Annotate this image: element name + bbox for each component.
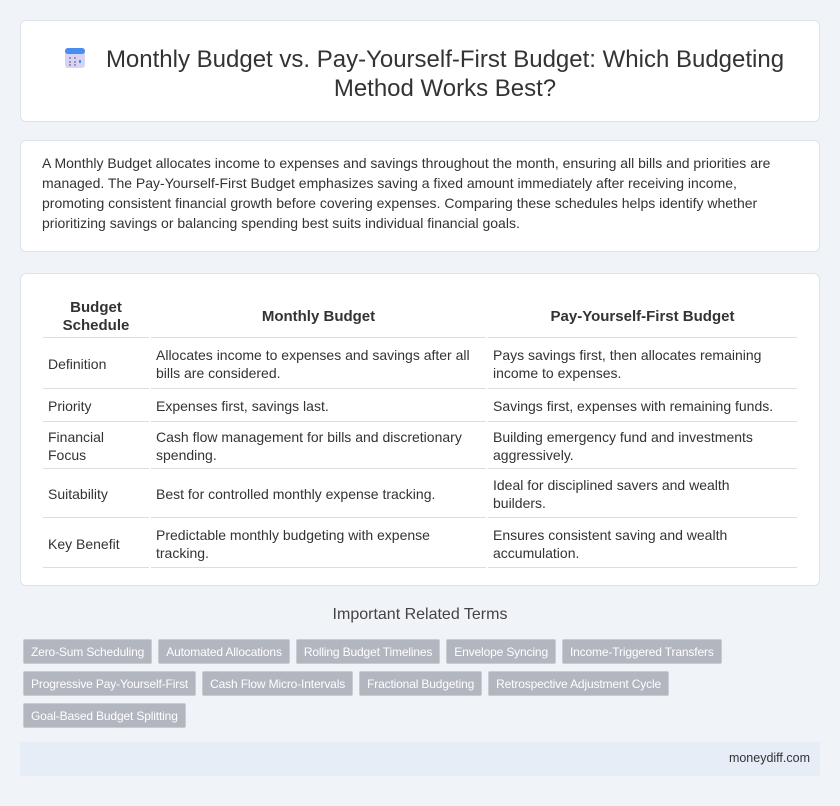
comparison table: Building emergency fund and investments aggressively. bbox=[493, 429, 753, 463]
intro paragraph: A Monthly Budget allocates income to expenses and savings throughout the month, ensuring all bills and priorities are managed. The Pay-Yourself-First Budget emphasizes saving a fixed amount immediately after receiving income, promoting consistent financial growth before covering expenses. Comparing these schedules helps identify whether prioritizing savings or balancing spending best suits individual financial goals. bbox=[42, 155, 770, 231]
comparison table card bbox=[20, 273, 820, 586]
related terms tags: Envelope Syncing bbox=[454, 645, 548, 659]
title card bbox=[20, 20, 820, 122]
comparison table: Ideal for disciplined savers and wealth builders. bbox=[493, 477, 730, 511]
comparison table: Pays savings first, then allocates remaining income to expenses. bbox=[493, 347, 761, 381]
related terms tags: Goal-Based Budget Splitting bbox=[31, 709, 178, 723]
related terms tags bbox=[23, 639, 722, 728]
footer bbox=[20, 742, 820, 776]
comparison table: Pay-Yourself-First Budget bbox=[551, 308, 734, 324]
footer source: moneydiff.com bbox=[729, 751, 810, 765]
comparison table: Best for controlled monthly expense tracking. bbox=[156, 486, 435, 502]
comparison table: Allocates income to expenses and savings after all bills are considered. bbox=[156, 347, 470, 381]
related terms tags: Cash Flow Micro-Intervals bbox=[210, 677, 345, 691]
related terms tags: Retrospective Adjustment Cycle bbox=[496, 677, 661, 691]
icon: calendar bbox=[65, 48, 85, 68]
related terms tags: Fractional Budgeting bbox=[367, 677, 474, 691]
comparison table: Ensures consistent saving and wealth accumulation. bbox=[493, 526, 727, 560]
related terms tags: Income-Triggered Transfers bbox=[570, 645, 714, 659]
comparison table bbox=[43, 298, 797, 568]
related terms tags: Rolling Budget Timelines bbox=[304, 645, 432, 659]
comparison table: Expenses first, savings last. bbox=[156, 398, 329, 414]
comparison table: Savings first, expenses with remaining funds. bbox=[493, 398, 773, 414]
related terms tags: Progressive Pay-Yourself-First bbox=[31, 677, 188, 691]
title: Monthly Budget vs. Pay-Yourself-First Budget: Which Budgeting Method Works Best? bbox=[106, 46, 784, 102]
comparison table: Budget Schedule bbox=[63, 298, 129, 334]
comparison table: Predictable monthly budgeting with expense tracking. bbox=[156, 526, 430, 560]
comparison table: Suitability bbox=[48, 486, 108, 502]
intro text card bbox=[20, 140, 820, 252]
comparison table: Financial Focus bbox=[48, 429, 104, 463]
comparison table: Key Benefit bbox=[48, 536, 120, 552]
related terms heading: Important Related Terms bbox=[333, 606, 507, 623]
comparison table: Definition bbox=[48, 356, 106, 372]
comparison table: Priority bbox=[48, 398, 92, 414]
comparison table: Cash flow management for bills and discretionary spending. bbox=[156, 429, 462, 463]
related terms tags: Automated Allocations bbox=[166, 645, 282, 659]
comparison table: Monthly Budget bbox=[262, 308, 375, 324]
related terms tags: Zero-Sum Scheduling bbox=[31, 645, 144, 659]
